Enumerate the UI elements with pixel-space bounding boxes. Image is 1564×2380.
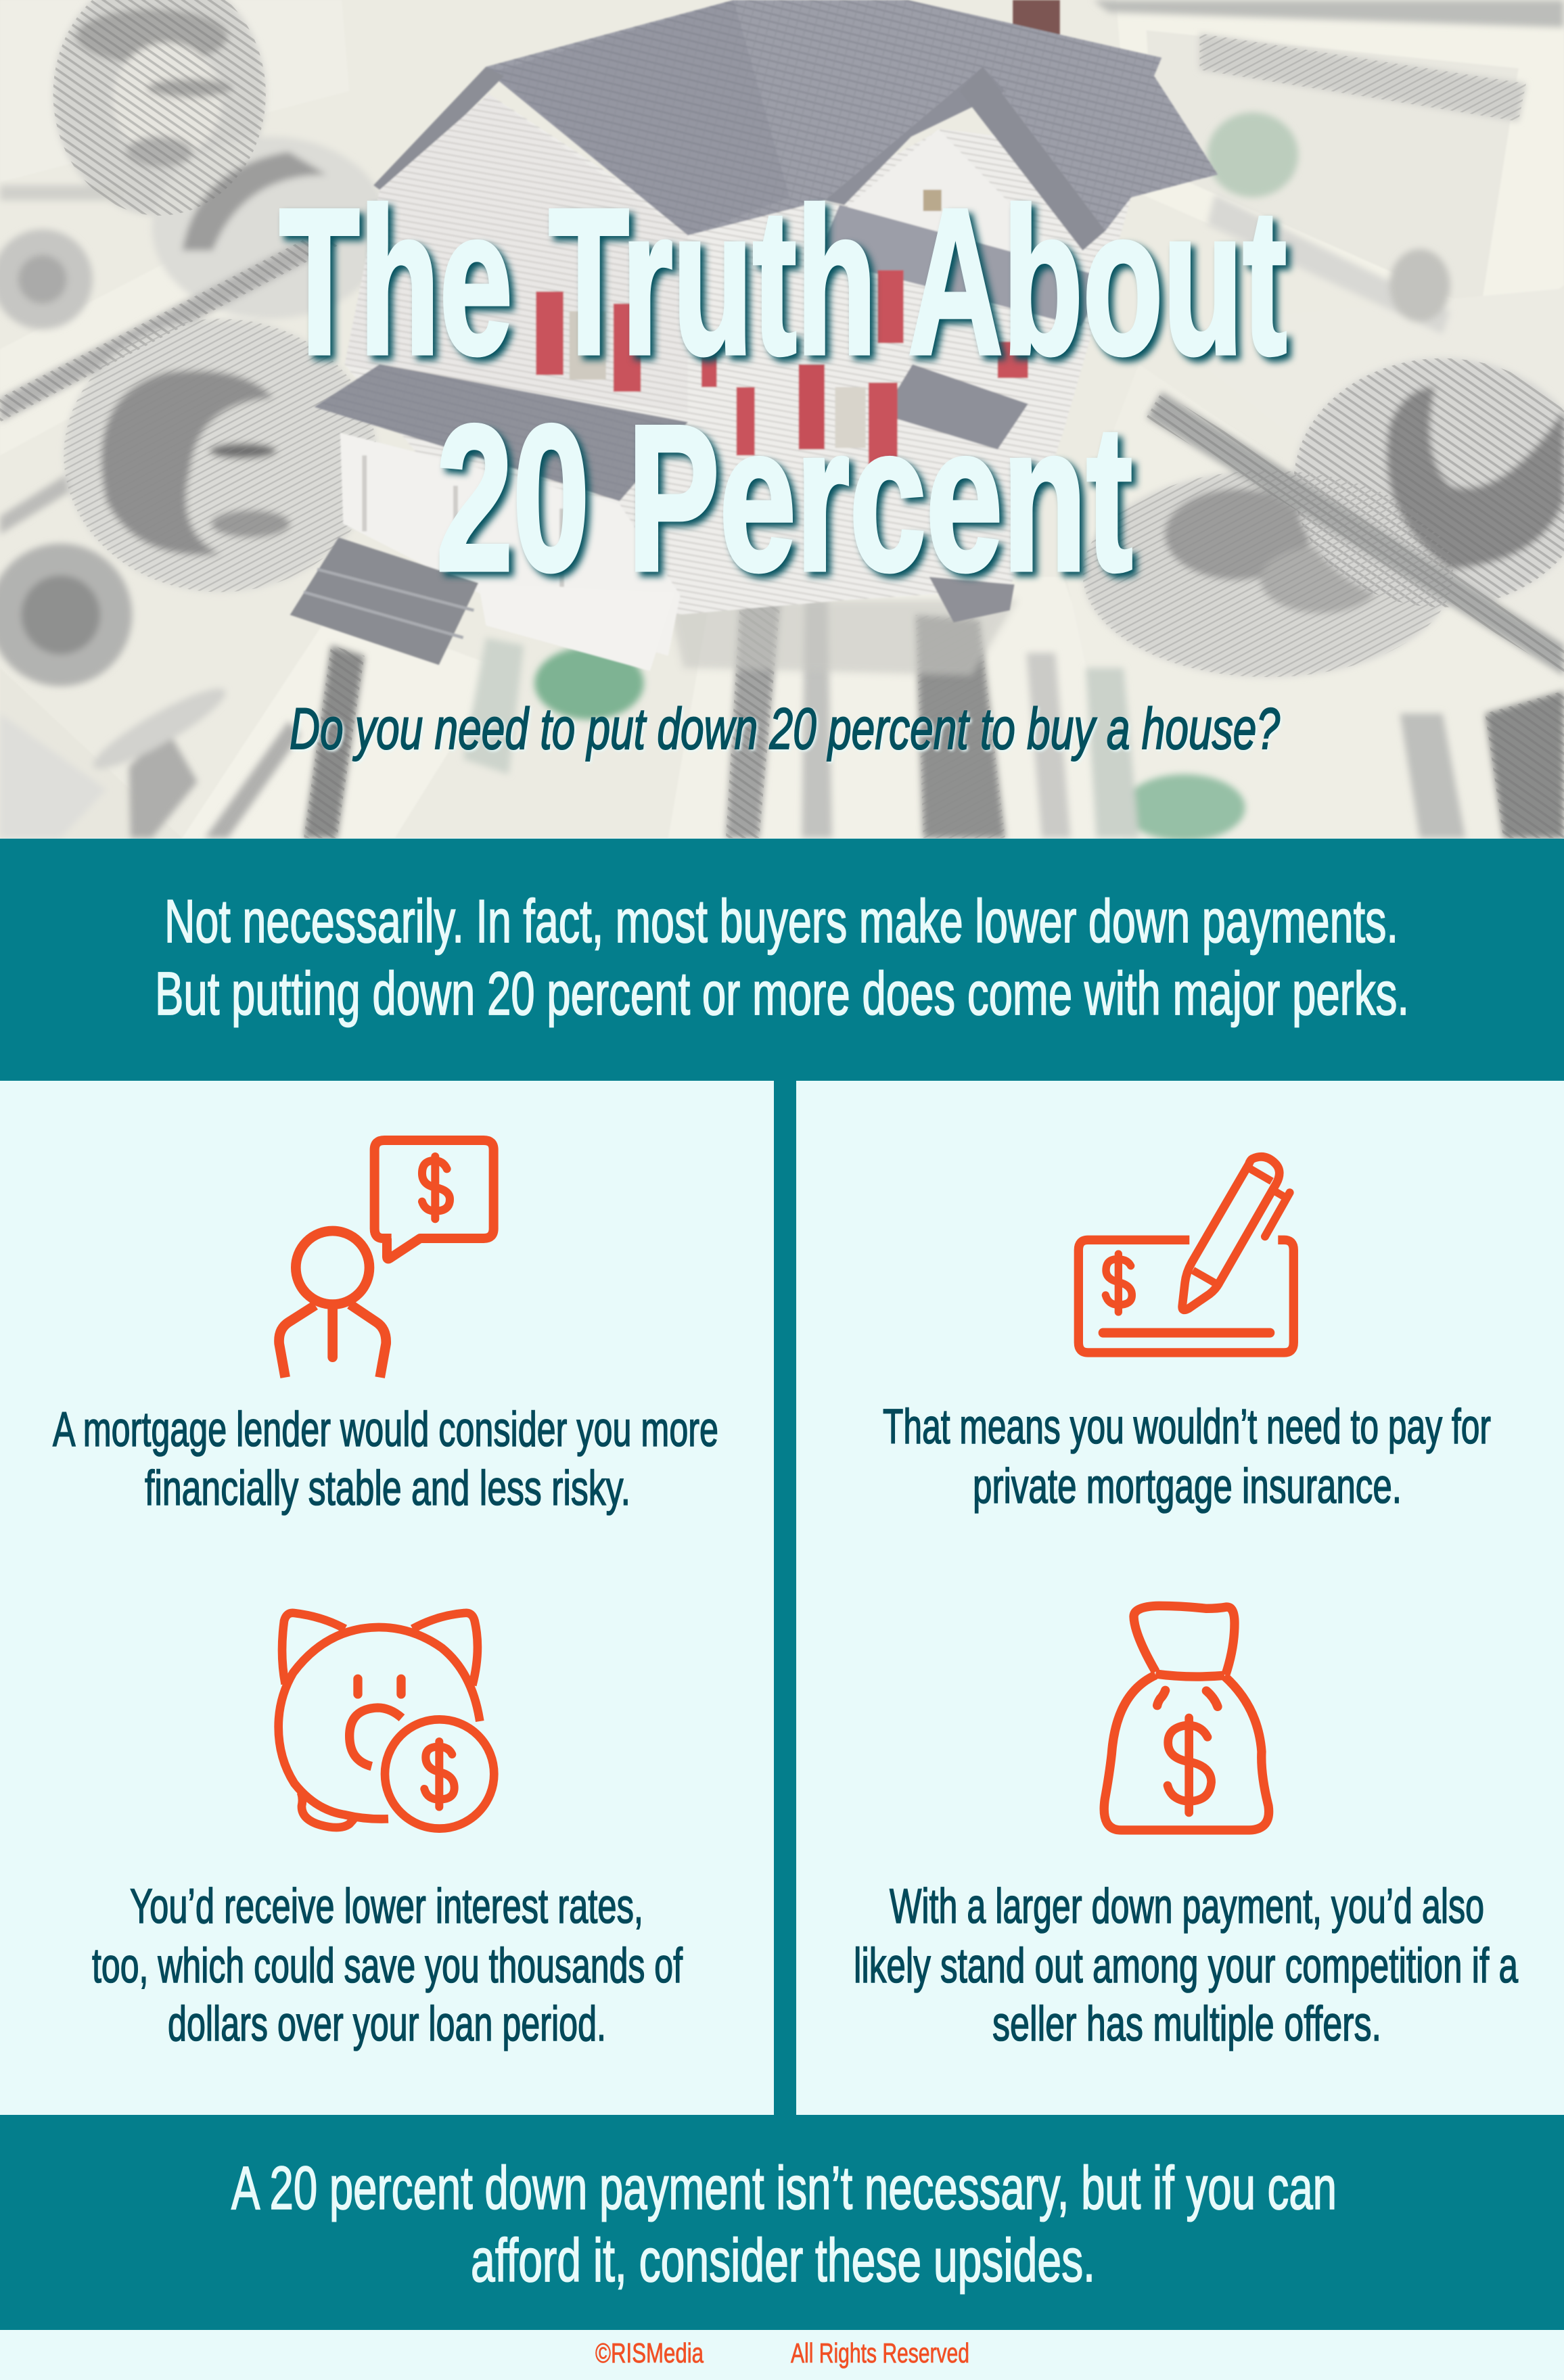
engraving hatch over bills bbox=[0, 0, 1564, 838]
porch roof bbox=[315, 365, 688, 501]
center right portrait bbox=[1082, 471, 1453, 677]
column divider bbox=[774, 1081, 796, 2115]
shadow bbox=[668, 600, 1017, 676]
icon: money bag bbox=[1104, 1606, 1269, 1830]
text: interest rates: dollars over your loan period. bbox=[168, 1997, 606, 2051]
footer credits: ©RISMedia bbox=[595, 2337, 704, 2369]
top intro band bbox=[0, 839, 1564, 1081]
main roof bbox=[486, 0, 1218, 235]
chimney bbox=[1013, 0, 1060, 45]
dormer gable bbox=[825, 67, 1005, 205]
green seals bbox=[534, 647, 644, 720]
text: lender: A mortgage lender would consider you more bbox=[53, 1403, 718, 1457]
second portrait bbox=[152, 137, 389, 319]
walls bbox=[345, 94, 1131, 615]
text: competition: seller has multiple offers. bbox=[992, 1997, 1381, 2051]
top right engraving bbox=[1199, 33, 1526, 122]
hero photo: model house on dollar bills bbox=[0, 0, 1564, 841]
lower-left portrait bbox=[64, 319, 377, 592]
icon: person with dollar speech bubble bbox=[279, 1140, 494, 1378]
footer credits bbox=[595, 2337, 969, 2369]
panel: interest rates bbox=[92, 1613, 683, 2051]
left seal bbox=[0, 229, 93, 329]
house bbox=[290, 0, 1218, 676]
icon: piggy bank with coin bbox=[279, 1613, 494, 1829]
porch bbox=[340, 433, 681, 656]
text: competition bbox=[854, 1880, 1519, 2051]
title: 20 Percent bbox=[436, 382, 1132, 613]
lattice bbox=[478, 583, 676, 671]
footer credits: All Rights Reserved bbox=[791, 2337, 969, 2369]
text: lender bbox=[53, 1403, 718, 1516]
right portrait bbox=[1293, 358, 1564, 607]
bottom-left seal bbox=[0, 544, 132, 686]
text: insurance: private mortgage insurance. bbox=[973, 1460, 1402, 1514]
steps bbox=[290, 538, 478, 665]
diagonal strips left bbox=[0, 239, 308, 423]
base bbox=[929, 577, 1014, 622]
dormer lower roof band bbox=[817, 205, 1107, 327]
top-left portrait bbox=[53, 0, 266, 216]
bottom conclusion band bbox=[0, 2115, 1564, 2330]
text: interest rates: too, which could save you thousands of bbox=[92, 1939, 683, 1993]
title bbox=[279, 166, 1287, 613]
panel: insurance bbox=[883, 1157, 1491, 1514]
left gable trim bbox=[373, 67, 504, 194]
text: interest rates bbox=[92, 1880, 683, 2051]
windows bbox=[570, 311, 606, 379]
panel: competition bbox=[854, 1606, 1519, 2051]
text: lender: financially stable and less risky. bbox=[145, 1462, 630, 1516]
B text and numerals strips bbox=[463, 638, 524, 774]
strip right bbox=[1147, 392, 1564, 676]
icon: check and pen bbox=[1078, 1157, 1293, 1353]
text: interest rates: You’d receive lower interest rates, bbox=[130, 1880, 643, 1934]
text: insurance bbox=[883, 1400, 1491, 1514]
awning bbox=[882, 365, 1028, 449]
bottom conclusion band: afford it, consider these upsides. bbox=[471, 2227, 1095, 2295]
shutters bbox=[536, 291, 564, 375]
panel: lender bbox=[53, 1140, 718, 1516]
vertical strips bbox=[304, 645, 365, 838]
